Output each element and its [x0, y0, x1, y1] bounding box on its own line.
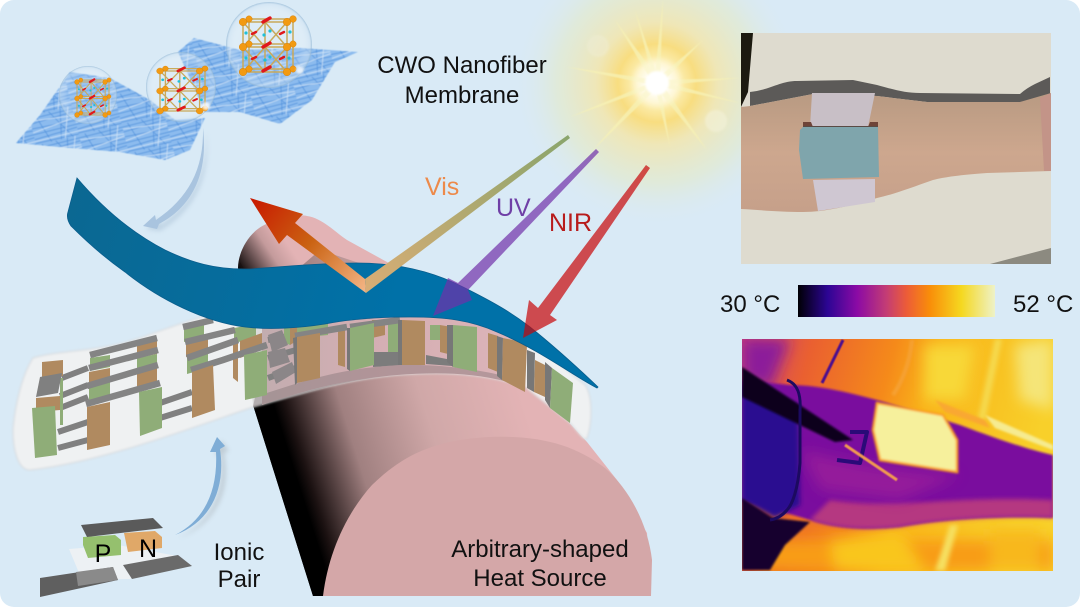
blue CWO film [67, 178, 598, 388]
ribbon substrate [13, 295, 591, 470]
front leg: green 3 [244, 350, 267, 400]
label: 52 °C: 52 °C [1013, 291, 1073, 318]
thermal: device hot spot [873, 403, 957, 472]
crystal bubble: medium [146, 52, 216, 122]
arrow: NIR [523, 165, 650, 338]
central legs [293, 320, 573, 423]
label: Vis: Vis [425, 173, 459, 201]
arm [742, 380, 1053, 529]
shadow band on cylinder [253, 365, 525, 407]
black side strip [253, 400, 326, 596]
front cap [36, 373, 62, 397]
back legs [36, 320, 498, 425]
label: Ionic Pair: Ionic [214, 539, 264, 566]
flexible thermoelectric ribbon [13, 295, 591, 470]
photo: device on forearm [741, 33, 1051, 264]
front leg: tan 2 [192, 365, 215, 418]
heat source cylinder [238, 215, 652, 596]
crystal bubble: large [226, 2, 312, 88]
arrow: membrane to film [143, 128, 207, 231]
thermal: top wires [822, 340, 843, 383]
ionic pair device [40, 518, 192, 597]
thermal: black cable band [742, 367, 853, 442]
N leg [124, 531, 162, 552]
cylinder seen through ribbon [262, 310, 527, 405]
stair connectors [268, 330, 296, 384]
label: Arbitrary-shaped Heat Source: Arbitrary-shaped [451, 536, 629, 563]
thermal image [742, 339, 1053, 571]
cylinder front face [323, 437, 652, 596]
P leg [83, 535, 121, 558]
nanofiber sheet: right [178, 38, 358, 124]
lower electrode right [123, 555, 192, 579]
front leg: green 1 [32, 406, 57, 458]
title label: CWO Nanofiber Membrane: Membrane [405, 82, 519, 109]
arrow: incoming visible light [365, 135, 570, 293]
front leg: tan 1 [87, 402, 110, 450]
crystal bubble: small [59, 66, 117, 124]
arrow: ionic pair to ribbon [175, 437, 229, 538]
back rows: grey connectors [58, 335, 296, 448]
label: Arbitrary-shaped Heat Source: Heat Source [473, 565, 607, 592]
icon: sun [512, 0, 802, 228]
lower electrode left [40, 567, 118, 597]
thermal: bright tape strip [985, 415, 1053, 450]
fiber membrane illustration [16, 2, 358, 160]
colour scale bar [798, 285, 995, 317]
label: N: N [139, 535, 157, 563]
label: UV: UV [496, 194, 531, 222]
title label: CWO Nanofiber Membrane: CWO Nanofiber [377, 52, 547, 79]
grey interconnects [86, 320, 400, 404]
arrow: UV [433, 149, 599, 316]
top electrode [81, 518, 163, 537]
arrow: reflected visible light [250, 198, 366, 293]
nanofiber sheet: left [16, 72, 205, 160]
label: P: P [95, 540, 111, 568]
front leg: green 2 [139, 387, 162, 436]
label: NIR: NIR [549, 209, 592, 237]
label: Ionic Pair: Pair [218, 566, 260, 593]
cylinder top bump [238, 215, 440, 340]
label: 30 °C: 30 °C [720, 291, 780, 318]
cylinder body [240, 250, 651, 596]
lower transparent base [69, 545, 177, 580]
